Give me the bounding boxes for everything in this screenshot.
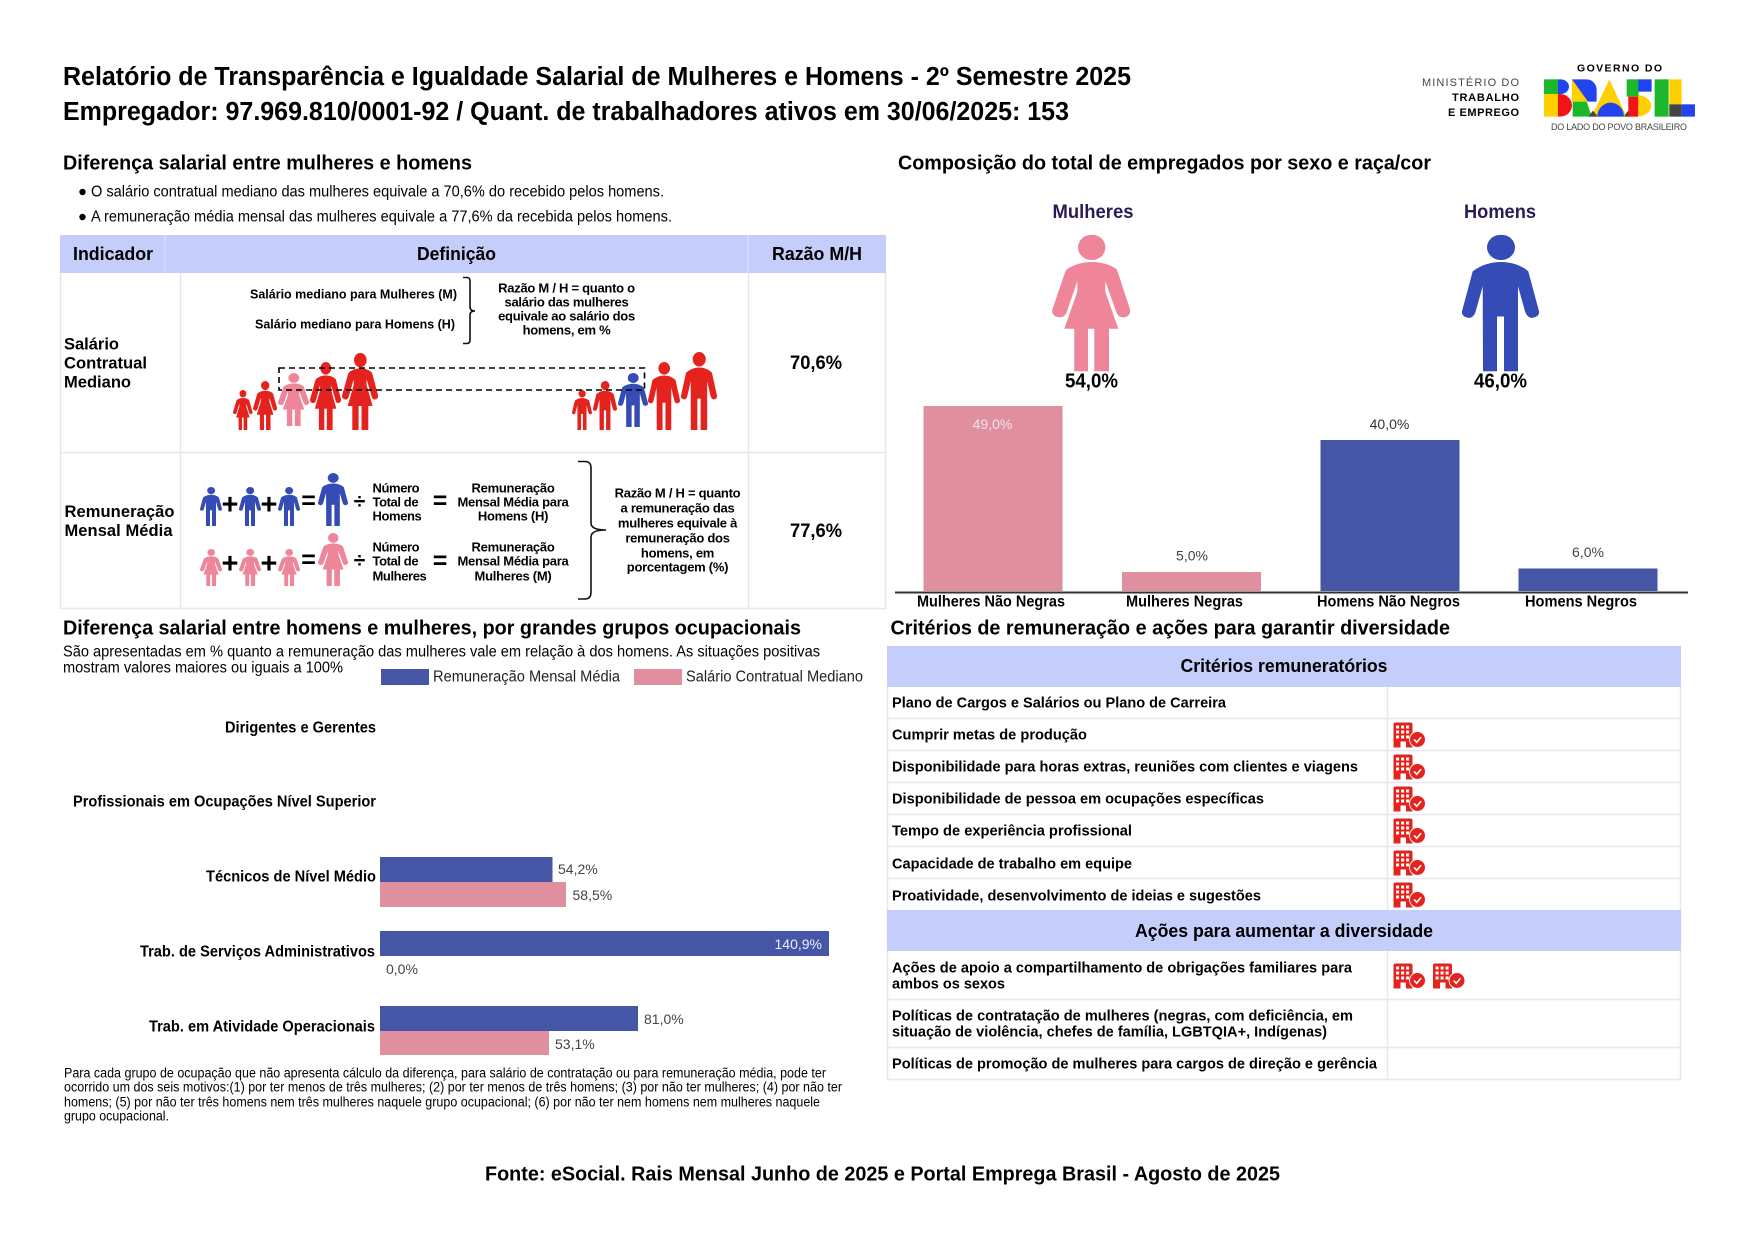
label: Mulheres: Mulheres (1052, 201, 1134, 223)
logo: Ministério do Trabalho e Emprego, Governo do Brasil: GOVERNO DO (1577, 62, 1662, 74)
ratio explanation: homens, em (641, 546, 714, 560)
category labels: Técnicos de Nível Médio (206, 868, 376, 886)
formula: men: Remuneração (471, 480, 555, 496)
icons: ações (1394, 964, 1465, 989)
bar chart: grupos ocupacionais: 0,0% (386, 961, 418, 977)
panel: composição (895, 152, 1688, 610)
definition labels (250, 286, 457, 332)
bar chart: sexo e raça/cor: Mulheres Negras (1126, 594, 1243, 610)
definition labels: Salário mediano para Homens (H) (255, 316, 455, 332)
formula: men: = (433, 487, 447, 515)
ratio explanation: Razão M / H = quanto o (498, 280, 635, 296)
bullet list: O salário contratual mediano das mulheres equivale a 70,6% do recebido pelos homens. (91, 184, 664, 200)
formula: men: ÷ (354, 490, 366, 514)
brace (578, 462, 606, 599)
list: critérios: Tempo de experiência profissional (892, 822, 1132, 840)
category labels: Trab. em Atividade Operacionais (149, 1018, 375, 1036)
dashed median box (279, 368, 644, 390)
table header: Indicador (73, 244, 153, 264)
row label: Contratual (64, 354, 147, 372)
brace (463, 278, 475, 344)
bar chart: sexo e raça/cor: 40,0% (1370, 416, 1409, 432)
footnote: homens; (5) por não ter três homens nem três mulheres naquele grupo ocupacional; (6) por não ter nem homens nem mulheres naquele (64, 1094, 820, 1110)
value: 54,0%: 54,0% (1065, 370, 1118, 392)
legend: Salário Contratual Mediano (686, 668, 863, 686)
table header: Definição (417, 244, 496, 264)
list: ações: Políticas de promoção de mulheres para cargos de direção e gerência (892, 1056, 1378, 1072)
formula: women: Remuneração (471, 540, 555, 554)
formula: women: Número (372, 540, 420, 554)
table header: Razão M/H (772, 244, 862, 264)
ratio explanation: a remuneração das (621, 500, 734, 516)
list: ações: ambos os sexos (892, 976, 1005, 992)
formula: women: ÷ (354, 550, 366, 572)
row label (64, 503, 174, 540)
formula: women (200, 533, 570, 586)
table header: critérios (887, 646, 1681, 687)
list: critérios: Cumprir metas de produção (892, 726, 1087, 744)
ratio value: 70,6% (790, 352, 842, 374)
list: critérios: Proatividade, desenvolvimento de ideias e sugestões (892, 888, 1261, 904)
bar chart: sexo e raça/cor: 49,0% (973, 416, 1012, 432)
list: critérios: Disponibilidade de pessoa em ocupações específicas (892, 790, 1264, 808)
table: indicadores (60, 235, 886, 608)
footnote: Para cada grupo de ocupação que não apresenta cálculo da diferença, para salário de contratação ou para remuneração média, pode ter (64, 1066, 826, 1080)
bar chart: grupos ocupacionais (380, 857, 829, 1055)
row label: Salário (64, 334, 119, 354)
icon: men group (572, 352, 717, 430)
ratio explanation: porcentagem (%) (627, 560, 728, 574)
ratio explanation: homens, em % (523, 322, 611, 338)
description: São apresentadas em % quanto a remuneração das mulheres vale em relação à dos homens. As situações positivas (63, 644, 820, 660)
panel: critérios e ações (887, 616, 1681, 1080)
category labels (73, 720, 376, 1036)
ratio explanation: Razão M / H = quanto (615, 486, 741, 500)
formula: women: + (222, 548, 238, 580)
bar chart: grupos ocupacionais: 140,9% (775, 936, 822, 952)
list: critérios: Disponibilidade para horas extras, reuniões com clientes e viagens (892, 758, 1358, 776)
logo: Ministério do Trabalho e Emprego, Governo do Brasil (1422, 62, 1695, 132)
bar chart: sexo e raça/cor: Mulheres Não Negras (917, 594, 1065, 610)
heading: Diferença salarial entre mulheres e homens (63, 152, 472, 174)
bar chart: sexo e raça/cor: 5,0% (1176, 548, 1208, 564)
icon: man (1462, 235, 1539, 371)
description (63, 644, 820, 676)
heading: Critérios de remuneração e ações para garantir diversidade (890, 616, 1450, 640)
ratio explanation (615, 486, 741, 574)
formula: men: + (261, 489, 277, 521)
formula: women: = (433, 547, 447, 575)
formula: men: + (222, 489, 238, 521)
bullet list (79, 184, 672, 226)
category labels: Profissionais em Ocupações Nível Superior (73, 794, 376, 810)
label: Homens: Homens (1464, 201, 1536, 223)
logo: Ministério do Trabalho e Emprego, Governo do Brasil: DO LADO DO POVO BRASILEIRO (1551, 122, 1687, 132)
row label: Mensal Média (64, 522, 173, 540)
list: critérios: Plano de Cargos e Salários ou Plano de Carreira (892, 694, 1227, 712)
formula: women: Mensal Média para (457, 554, 570, 568)
bar chart: grupos ocupacionais: 53,1% (555, 1036, 595, 1052)
formula: men: Homens (H) (478, 508, 548, 524)
heading: Diferença salarial entre homens e mulheres, por grandes grupos ocupacionais (63, 616, 801, 640)
row label: Mediano (64, 372, 131, 392)
list: ações: situação de violência, chefes de família, LGBTQIA+, Indígenas) (892, 1024, 1327, 1040)
table header: ações: Ações para aumentar a diversidade (1135, 921, 1433, 941)
formula: women: Mulheres (372, 568, 427, 584)
category labels: Dirigentes e Gerentes (225, 720, 376, 736)
heading: Composição do total de empregados por sexo e raça/cor (898, 152, 1431, 174)
formula: men: Total de (372, 494, 418, 510)
formula: men: Número (372, 480, 420, 496)
bar chart: sexo e raça/cor: 6,0% (1572, 544, 1604, 560)
bar chart: sexo e raça/cor (895, 406, 1688, 610)
bar chart: grupos ocupacionais: 54,2% (558, 861, 598, 877)
bar chart: sexo e raça/cor: Homens Não Negros (1317, 594, 1460, 610)
panel: grupos ocupacionais (63, 616, 863, 1124)
logo: Ministério do Trabalho e Emprego, Governo do Brasil: E EMPREGO (1448, 107, 1519, 119)
row: Remuneração Mensal Média (64, 462, 842, 599)
footnote (64, 1066, 842, 1124)
formula: men: Mensal Média para (457, 494, 570, 510)
value: 46,0%: 46,0% (1474, 370, 1527, 392)
title: Relatório de Transparência e Igualdade Salarial de Mulheres e Homens - 2º Semestre 2025 (63, 63, 1131, 91)
description: mostram valores maiores ou iguais a 100% (63, 660, 343, 676)
icon: woman (1052, 235, 1130, 371)
legend: Remuneração Mensal Média (433, 668, 620, 686)
footnote: grupo ocupacional. (64, 1108, 169, 1124)
table header: critérios: Critérios remuneratórios (1180, 656, 1388, 676)
row label (64, 334, 147, 392)
icon: women group (233, 353, 378, 430)
bar chart: grupos ocupacionais: 81,0% (644, 1011, 684, 1027)
footnote: ocorrido um dos seis motivos:(1) por ter menos de três mulheres; (2) por ter menos de três homens; (3) por não ter mulheres; (4) por não ter (64, 1080, 842, 1094)
logo: Ministério do Trabalho e Emprego, Governo do Brasil: TRABALHO (1452, 92, 1519, 104)
formula: women: + (261, 548, 277, 580)
title (63, 63, 1131, 126)
row: Salário Contratual Mediano (64, 278, 842, 430)
title: Empregador: 97.969.810/0001-92 / Quant. de trabalhadores ativos em 30/06/2025: 153 (63, 98, 1069, 126)
definition labels: Salário mediano para Mulheres (M) (250, 286, 457, 302)
ratio value: 77,6% (790, 520, 842, 542)
icons: critérios (1394, 722, 1426, 908)
bullet list: A remuneração média mensal das mulheres equivale a 77,6% da recebida pelos homens. (91, 208, 672, 226)
logo: Ministério do Trabalho e Emprego, Governo do Brasil: MINISTÉRIO DO (1422, 76, 1519, 89)
formula: men: = (301, 487, 316, 515)
category labels: Trab. de Serviços Administrativos (140, 944, 375, 960)
ratio explanation (498, 280, 635, 338)
row label: Remuneração (64, 503, 174, 521)
legend (381, 668, 863, 686)
formula: men: Homens (372, 508, 422, 524)
list: ações (892, 960, 1378, 1072)
ratio explanation: salário das mulheres (505, 294, 629, 310)
bar chart: sexo e raça/cor: Homens Negros (1525, 594, 1637, 610)
ratio explanation: mulheres equivale à (618, 516, 738, 530)
panel: diferença salarial (63, 152, 672, 226)
formula: men (200, 473, 570, 526)
ratio explanation: equivale ao salário dos (498, 308, 635, 324)
list: critérios: Capacidade de trabalho em equipe (892, 856, 1132, 872)
formula: women: = (301, 546, 316, 574)
table header: ações (887, 910, 1681, 951)
list: ações: Ações de apoio a compartilhamento de obrigações familiares para (892, 960, 1353, 976)
table header (60, 235, 886, 273)
formula: women: Mulheres (M) (475, 568, 551, 584)
list: critérios (892, 694, 1358, 904)
source footer: Fonte: eSocial. Rais Mensal Junho de 2025 e Portal Emprega Brasil - Agosto de 2025 (485, 1162, 1280, 1186)
bar chart: grupos ocupacionais: 58,5% (572, 887, 612, 903)
list: ações: Políticas de contratação de mulheres (negras, com deficiência, em (892, 1008, 1353, 1024)
formula: women: Total de (372, 554, 418, 568)
ratio explanation: remuneração dos (625, 530, 730, 546)
